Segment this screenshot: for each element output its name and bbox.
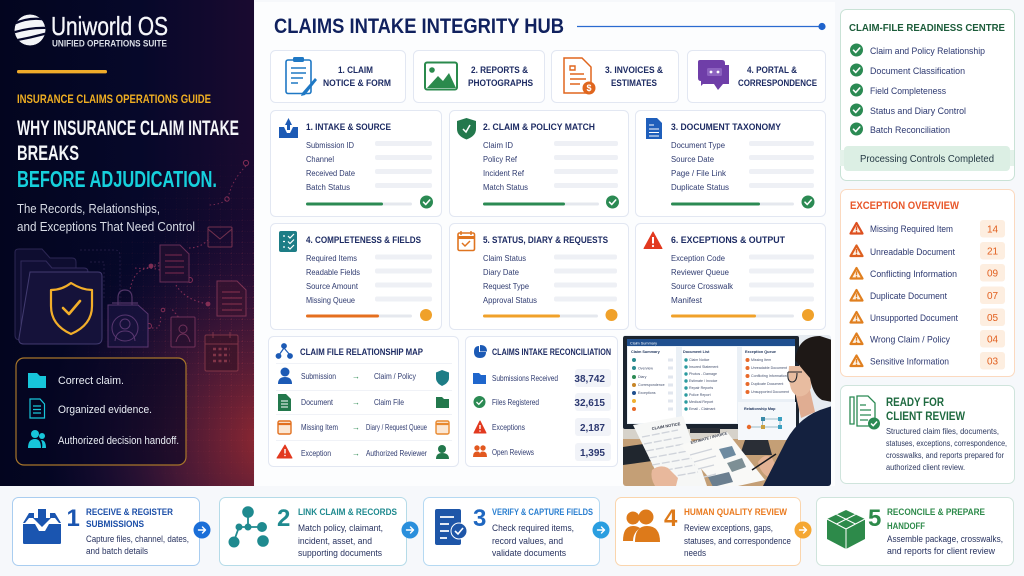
- process step 1: and batch details: [86, 546, 149, 556]
- panel: claim file relationship map: [268, 336, 458, 466]
- icon: calendar: [458, 231, 474, 250]
- monitor: Insured Statement: [689, 365, 718, 369]
- process step 2: Match policy, claimant,: [298, 523, 383, 533]
- panel: 6 exceptions and output: Source Crosswalk: [671, 281, 734, 291]
- panel: claim-file readiness centre: CLAIM-FILE READINESS CENTRE: [849, 22, 1005, 34]
- row: exceptions: 2,187: [580, 423, 605, 434]
- process step 2: incident, asset, and: [298, 536, 372, 546]
- row: missing item to diary queue: [278, 421, 449, 434]
- panel: claims intake reconciliation: [466, 336, 618, 466]
- panel: 3 document taxonomy: Document Type: [671, 140, 725, 150]
- callout: outcomes: Correct claim.: [58, 375, 124, 387]
- panel: 1 intake and source: Submission ID: [306, 140, 354, 150]
- logo: Uniworld OS: UNIFIED OPERATIONS SUITE: [52, 38, 167, 48]
- panel: exception overview: 05: [987, 313, 998, 324]
- row: missing item to diary queue: Missing Item: [301, 422, 338, 432]
- process step 4: 4: [664, 505, 678, 532]
- panel: 1 intake and source: [270, 110, 442, 216]
- row: exception to authorized reviewer: →: [352, 449, 360, 458]
- row: submissions received: 38,742: [574, 374, 605, 385]
- panel: exception overview: Wrong Claim / Policy: [870, 334, 950, 344]
- card: invoices and estimates: [552, 50, 678, 102]
- panel: 5 status, diary and requests: 5. STATUS, DIARY & REQUESTS: [483, 235, 608, 245]
- panel: 6 exceptions and output: Reviewer Queue: [671, 267, 729, 277]
- process step 2: 2: [277, 505, 290, 532]
- row: document to claim file: [278, 394, 449, 411]
- monitor: Claim Summary: [631, 350, 661, 354]
- panel: claim-file readiness centre: Status and Diary Control: [870, 106, 966, 116]
- icon: warning: [644, 232, 662, 248]
- eyebrow: INSURANCE CLAIMS OPERATIONS GUIDE: [17, 94, 211, 106]
- status band: Processing Controls Completed: [860, 154, 994, 165]
- title: hub: [274, 15, 826, 38]
- row: submissions received: [473, 369, 611, 387]
- process step 5: [816, 498, 1014, 566]
- process step 1: SUBMISSIONS: [86, 518, 144, 529]
- panel: 4 completeness and fields: Missing Queue: [306, 295, 355, 305]
- process step 4: statuses, and correspondence: [684, 536, 791, 546]
- card: reports and photographs: PHOTOGRAPHS: [468, 78, 533, 88]
- panel: claim-file readiness centre: Document Classification: [870, 66, 965, 76]
- main heading: WHY INSURANCE CLAIM INTAKE: [17, 117, 239, 140]
- panel: claim-file readiness centre: [840, 10, 1014, 180]
- process step 4: needs: [684, 548, 707, 558]
- panel: 4 completeness and fields: Readable Fields: [306, 267, 360, 277]
- panel: 3 document taxonomy: [636, 110, 826, 216]
- panel: ready for client review: CLIENT REVIEW: [886, 411, 965, 423]
- process step 5: RECONCILE & PREPARE: [887, 506, 985, 517]
- card: portal and correspondence: [688, 50, 826, 102]
- panel: 6 exceptions and output: [636, 224, 826, 330]
- row: missing item to diary queue: Diary / Request Queue: [366, 422, 427, 432]
- icon: pie chart: [474, 345, 487, 358]
- monitor: Overview: [638, 366, 653, 370]
- panel: exception overview: 04: [987, 334, 998, 346]
- monitor: Correspondence: [638, 383, 665, 387]
- process step 5: HANDOFF: [887, 520, 925, 531]
- panel: 1 intake and source: Received Date: [306, 168, 355, 178]
- panel: claim file relationship map: CLAIM FILE RELATIONSHIP MAP: [300, 347, 423, 357]
- card: invoices and estimates: ESTIMATES: [611, 78, 657, 88]
- panel: source type cards: [270, 50, 826, 102]
- panel: 6 exceptions and output: 6. EXCEPTIONS & OUTPUT: [671, 235, 785, 245]
- monitor: Claim Notice: [689, 358, 709, 362]
- icon: link network: [229, 507, 268, 547]
- panel: exception overview: Conflicting Information: [870, 269, 957, 279]
- card: invoices and estimates: $: [586, 83, 592, 93]
- panel: 3 document taxonomy: Page / File Link: [671, 168, 727, 178]
- monitor: Estimate / Invoice: [689, 379, 717, 383]
- subheading: and Exceptions That Need Control: [17, 220, 195, 234]
- panel: ready for client review: READY FOR: [886, 397, 945, 409]
- panel: 6 exceptions and output: Exception Code: [671, 253, 725, 263]
- panel: 4 completeness and fields: 4. COMPLETENESS & FIELDS: [306, 235, 421, 245]
- logo: Uniworld OS: Uniworld OS: [51, 11, 168, 41]
- process step 2: LINK CLAIM & RECORDS: [298, 506, 397, 517]
- panel: exception overview: Unsupported Document: [870, 313, 958, 323]
- process step 3: record values, and: [492, 536, 563, 546]
- icon: inbox: [279, 118, 298, 138]
- monitor: Email - Claimant: [689, 407, 715, 411]
- process step 3: validate documents: [492, 548, 567, 558]
- icon: people: [28, 430, 46, 448]
- process step 1: [12, 498, 210, 566]
- panel: 4 completeness and fields: Source Amount: [306, 281, 359, 291]
- panel: 5 status, diary and requests: [450, 224, 628, 330]
- process step 3: 3: [473, 505, 486, 532]
- monitor: Unreadable Document: [751, 366, 787, 370]
- estimate paper: [680, 431, 765, 490]
- photo: reviewer at monitor with claim papers: [623, 335, 832, 490]
- status band: [840, 146, 1014, 171]
- icon: verify document: [435, 509, 467, 545]
- process step 5: and reports for client review: [887, 546, 996, 556]
- title: hub: CLAIMS INTAKE INTEGRITY HUB: [274, 15, 564, 38]
- process step 1: 1: [66, 505, 80, 532]
- row: exception to authorized reviewer: Authorized Reviewer: [366, 448, 427, 458]
- monitor: Document List: [683, 350, 710, 354]
- arrow: [402, 522, 418, 538]
- process step 3: VERIFY & CAPTURE FIELDS: [492, 506, 593, 517]
- monitor: Conflicting Information: [751, 374, 787, 378]
- row: submission to claim or policy: Claim / Policy: [374, 371, 417, 381]
- card: portal and correspondence: CORRESPONDENCE: [738, 78, 817, 88]
- process step 4: [616, 498, 812, 566]
- monitor: [623, 336, 799, 440]
- process step 1: Capture files, channel, dates,: [86, 534, 189, 544]
- icon: document: [30, 399, 44, 418]
- panel: 2 claim and policy match: Match Status: [483, 182, 528, 192]
- arrow: [592, 522, 610, 538]
- icon: checklist: [279, 231, 297, 252]
- claim notice paper: CLAIM NOTICE: [651, 421, 681, 431]
- process step 5: Assemble package, crosswalks,: [887, 534, 1003, 544]
- row: open reviews: [473, 443, 611, 461]
- row: document to claim file: →: [352, 398, 360, 407]
- panel: 3 document taxonomy: Source Date: [671, 154, 714, 164]
- main heading: BEFORE ADJUDICATION.: [17, 166, 217, 192]
- card: claim notice and form: [270, 50, 406, 102]
- process step 5: 5: [868, 505, 881, 532]
- monitor: Photos - Damage: [689, 372, 717, 376]
- arrow: [794, 522, 812, 538]
- icon: package: [827, 510, 865, 549]
- row: exceptions: Exceptions: [492, 422, 525, 432]
- arrow: [194, 522, 210, 538]
- callout: outcomes: Authorized decision handoff.: [58, 435, 179, 447]
- panel: 1 intake and source: Channel: [306, 154, 334, 164]
- panel: exception overview: EXCEPTION OVERVIEW: [850, 200, 960, 212]
- process step 4: HUMAN QUALITY REVIEW: [684, 506, 787, 517]
- process step 2: [220, 498, 418, 566]
- row: missing item to diary queue: →: [352, 423, 360, 432]
- panel: 4 completeness and fields: Required Items: [306, 253, 357, 263]
- panel: 3 document taxonomy: Duplicate Status: [671, 182, 729, 192]
- row: exceptions: [474, 418, 611, 436]
- card: portal and correspondence: 4. PORTAL &: [747, 65, 797, 75]
- panel: 2 claim and policy match: Incident Ref: [483, 168, 525, 178]
- row: submission to claim or policy: Submission: [301, 371, 336, 381]
- panel: exception overview: 14: [987, 224, 998, 236]
- row: submission to claim or policy: [278, 368, 449, 386]
- icon: inbox tray: [23, 509, 61, 544]
- panel: ready for client review: crosswalks, and reports prepared for: [886, 450, 1004, 460]
- monitor stand and keyboard: [623, 428, 772, 465]
- illustration: folders, documents and shield: [15, 160, 249, 371]
- process step 2: supporting documents: [298, 548, 383, 558]
- panel: exception overview: 07: [987, 291, 998, 302]
- main heading: [17, 117, 239, 192]
- row: files registered: Files Registered: [492, 397, 539, 407]
- monitor: Diary: [638, 375, 647, 379]
- process step 3: [424, 498, 610, 566]
- logo: Uniworld OS: [14, 14, 168, 46]
- estimate paper: ESTIMATE / INVOICE: [690, 431, 728, 445]
- card: invoices and estimates: 3. INVOICES &: [605, 65, 663, 75]
- process step 4: Review exceptions, gaps,: [684, 523, 773, 533]
- row: files registered: [474, 393, 611, 411]
- panel: ready for client review: authorized client review.: [886, 462, 965, 472]
- panel: ready for client review: Structured claim files, documents,: [886, 426, 999, 436]
- panel: 2 claim and policy match: 2. CLAIM & POLICY MATCH: [483, 122, 595, 132]
- panel: 6 exceptions and output: Manifest: [671, 295, 703, 305]
- row: exception to authorized reviewer: Exception: [301, 448, 331, 458]
- monitor: Duplicate Document: [751, 382, 783, 386]
- panel: exception overview: 03: [987, 356, 998, 368]
- card: reports and photographs: 2. REPORTS &: [471, 65, 528, 75]
- hands and pen: [651, 454, 778, 486]
- panel: exception overview: 09: [987, 268, 998, 280]
- panel: 2 claim and policy match: Claim ID: [483, 140, 513, 150]
- icon: document: [646, 118, 662, 139]
- monitor: Repair Reports: [689, 386, 713, 390]
- panel: exception overview: 21: [987, 246, 998, 258]
- row: exception to authorized reviewer: [277, 445, 449, 459]
- card: reports and photographs: [414, 50, 544, 102]
- card: claim notice and form: NOTICE & FORM: [323, 78, 391, 88]
- panel: claim-file readiness centre: Claim and Policy Relationship: [870, 46, 985, 56]
- panel: guide cover: [0, 0, 254, 486]
- monitor: Relationship Map: [744, 407, 776, 411]
- monitor: Exception Queue: [745, 350, 776, 354]
- monitor: Missing Item: [751, 358, 771, 362]
- panel: 5 status, diary and requests: Request Type: [483, 281, 529, 291]
- panel: claim-file readiness centre: Batch Reconciliation: [870, 125, 950, 135]
- process step 1: RECEIVE & REGISTER: [86, 506, 173, 517]
- panel: claims intake reconciliation: CLAIMS INTAKE RECONCILIATION: [492, 347, 611, 357]
- panel: 1 intake and source: Batch Status: [306, 182, 350, 192]
- monitor: Medical Report: [689, 400, 713, 404]
- panel: ready for client review: [840, 386, 1014, 484]
- panel: exception overview: Duplicate Document: [870, 291, 947, 301]
- panel: exception overview: [840, 190, 1014, 376]
- panel: 2 claim and policy match: Policy Ref: [483, 154, 518, 164]
- callout: outcomes: Organized evidence.: [58, 404, 152, 416]
- monitor: Unsupported Document: [751, 390, 789, 394]
- reviewer: [763, 336, 832, 486]
- monitor: Claim Summary: [630, 342, 657, 346]
- claim notice paper: [633, 416, 707, 486]
- icon: document with check: [850, 396, 880, 430]
- icon: shield: [457, 118, 476, 140]
- row: submission to claim or policy: →: [352, 372, 360, 381]
- row: submissions received: Submissions Received: [492, 373, 558, 383]
- callout: outcomes: [16, 358, 186, 465]
- subheading: The Records, Relationships,: [17, 202, 160, 216]
- icon: reviewers: [623, 510, 660, 542]
- panel: 4 completeness and fields: [270, 224, 442, 330]
- panel: exception overview: Sensitive Information: [870, 356, 949, 366]
- row: document to claim file: Claim File: [374, 397, 404, 407]
- panel: 1 intake and source: 1. INTAKE & SOURCE: [306, 122, 391, 132]
- monitor: Exceptions: [638, 391, 656, 395]
- icon: folder: [28, 373, 46, 388]
- panel: 3 document taxonomy: 3. DOCUMENT TAXONOMY: [671, 122, 781, 132]
- panel: claim-file readiness centre: Field Completeness: [870, 86, 946, 96]
- main heading: BREAKS: [17, 142, 79, 165]
- process step 3: Check required items,: [492, 523, 574, 533]
- card: claim notice and form: 1. CLAIM: [338, 65, 373, 75]
- icon: network: [276, 344, 292, 358]
- panel: exception overview: Unreadable Document: [870, 247, 955, 257]
- row: document to claim file: Document: [301, 397, 333, 407]
- panel: 2 claim and policy match: [450, 110, 628, 216]
- panel: 5 status, diary and requests: Claim Status: [483, 253, 526, 263]
- monitor: Police Report: [689, 393, 711, 397]
- panel: 5 status, diary and requests: Diary Date: [483, 267, 519, 277]
- row: files registered: 32,615: [574, 398, 605, 409]
- row: open reviews: Open Reviews: [492, 447, 534, 457]
- panel: 5 status, diary and requests: Approval Status: [483, 295, 537, 305]
- row: open reviews: 1,395: [580, 448, 605, 459]
- subheading: [17, 202, 195, 234]
- panel: exception overview: Missing Required Item: [870, 224, 953, 234]
